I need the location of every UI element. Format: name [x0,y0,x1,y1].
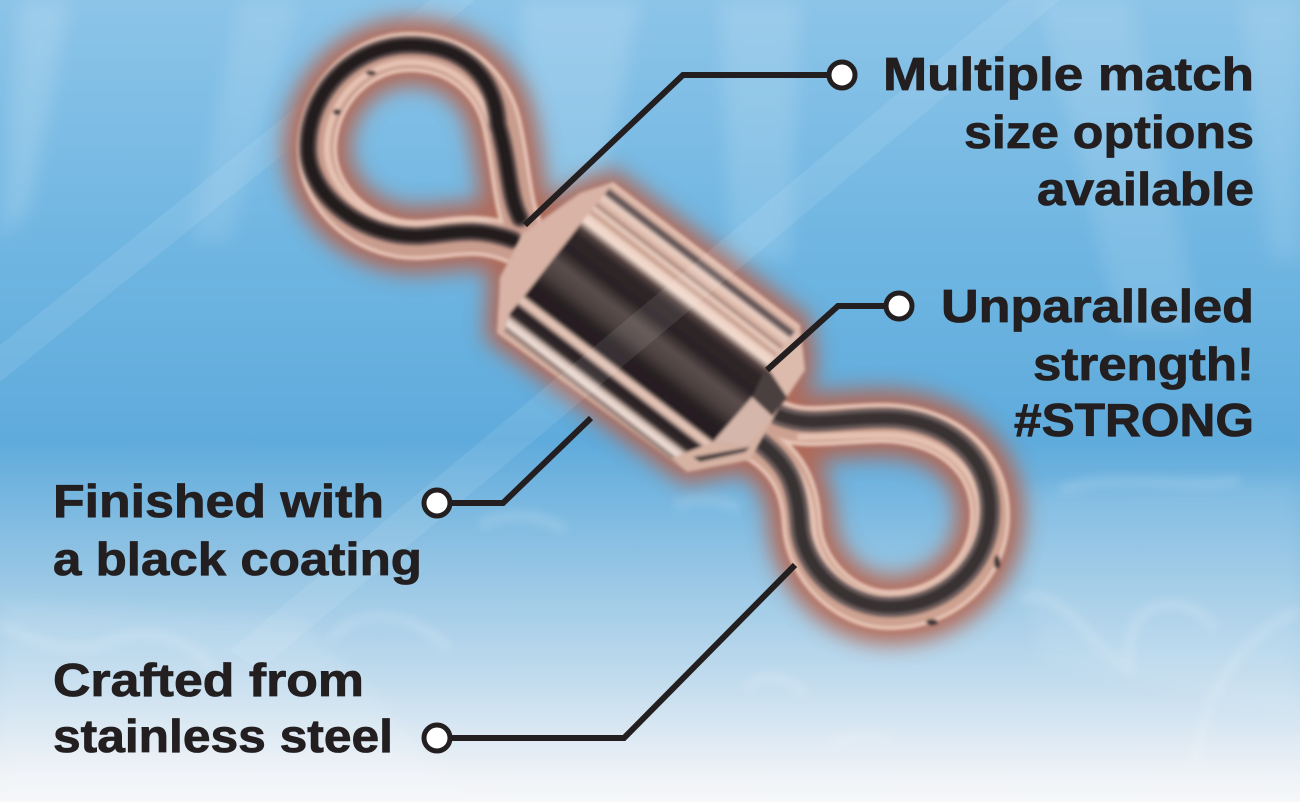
label text: Crafted from [53,654,364,706]
label text: Unparalleled [941,280,1254,332]
lower barrel cap [767,325,805,397]
callout: multiple match sizes [525,48,1254,225]
label text: size options [964,106,1254,158]
barrel [497,182,805,472]
callout: unparalleled strength [767,280,1254,446]
marker [424,725,450,751]
marker [886,293,912,319]
label text: available [1037,163,1254,215]
label text: #STRONG [1014,394,1254,446]
leader line [437,565,795,738]
label text: strength! [1033,338,1254,390]
label text: Multiple match [883,48,1254,100]
callout: stainless steel [53,565,795,762]
swivel: stainless steel rolling swivel [308,45,1000,625]
leader line [525,75,842,225]
callout: black coating [53,418,591,585]
label text: stainless steel [53,710,393,762]
light ray across swivel [230,0,1060,670]
swivel glow [317,52,990,610]
marker [424,490,450,516]
lower eye ring [757,415,1000,625]
label text: a black coating [53,533,422,585]
marker [829,62,855,88]
leader line [437,418,591,503]
label text: Finished with [53,475,384,527]
upper eye ring [308,45,522,245]
upper barrel cap [497,182,613,333]
leader line [767,306,899,370]
